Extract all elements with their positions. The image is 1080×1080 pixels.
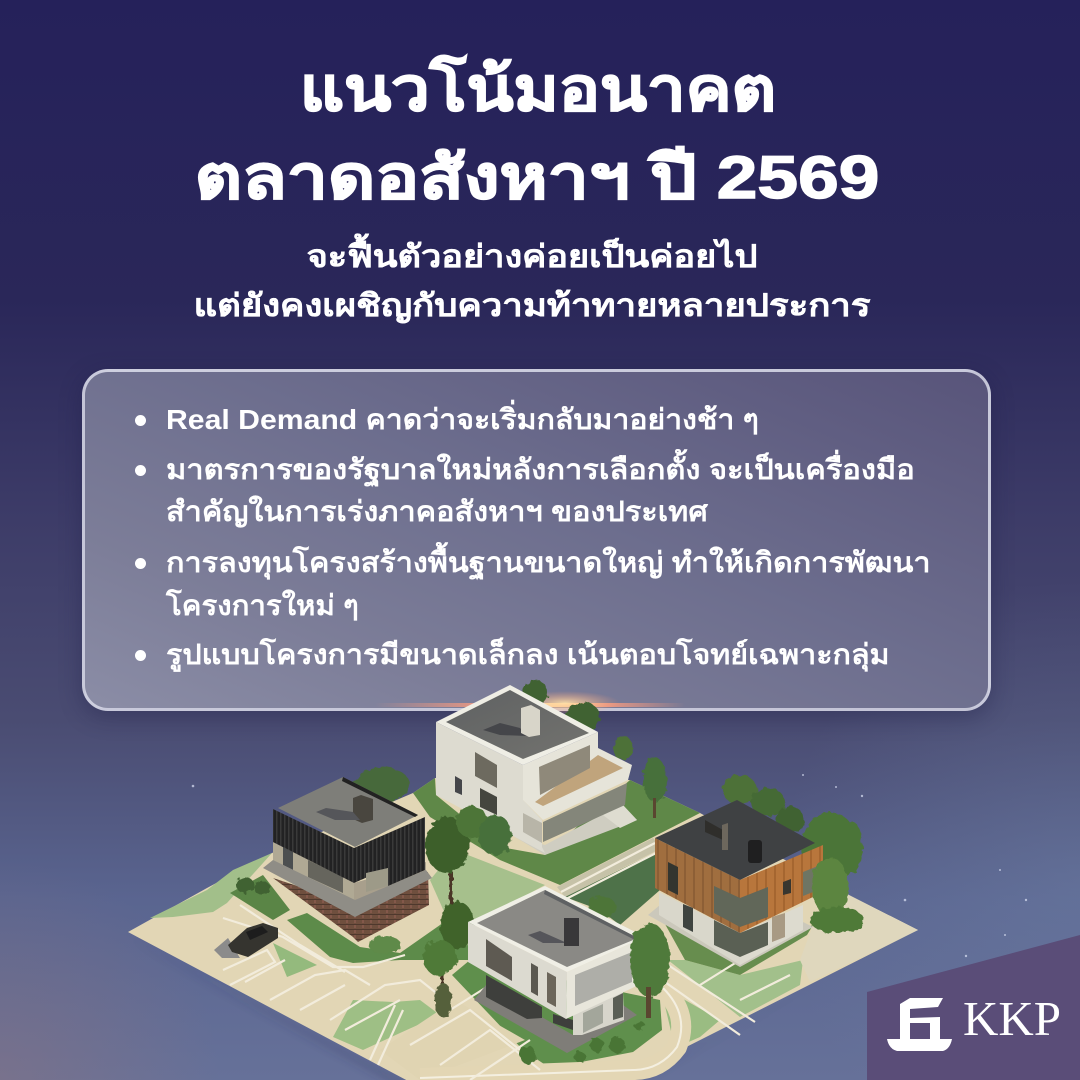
- tree trunks: [646, 798, 656, 1018]
- bullet 3: [135, 542, 930, 621]
- car: [214, 923, 278, 958]
- ground shadow: [128, 936, 918, 1080]
- logo wordmark: KKP: [963, 991, 1061, 1046]
- sun glow: [375, 691, 685, 715]
- subtitle: จะฟื้นตัวอย่างค่อยเป็นค่อยไป: [307, 239, 757, 274]
- title: แนวโน้มอนาคต: [300, 56, 776, 123]
- trees: right of timber house: [810, 857, 864, 933]
- bullet list: Real Demand คาดว่าจะเริ่มกลับมาอย่างช้า ๆ: [166, 404, 759, 435]
- subtitle: แต่ยังคงเผชิญกับความท้าทายหลายประการ: [194, 288, 870, 323]
- panel: key trends: [82, 369, 991, 711]
- ground plate: [128, 778, 918, 1080]
- bullet list: รูปแบบโครงการมีขนาดเล็กลง เน้นตอบโจทย์เฉพาะกลุ่ม: [166, 639, 890, 670]
- bullet 2: [135, 449, 915, 528]
- title: ตลาดอสังหาฯ ปี 2569: [195, 144, 879, 211]
- bullet list: สำคัญในการเร่งภาคอสังหาฯ ของประเทศ: [166, 496, 708, 527]
- trees: centre: [425, 806, 616, 949]
- house: black clad: [263, 777, 432, 942]
- bullet list: [135, 400, 930, 672]
- bullet 1: [135, 400, 759, 435]
- bullet 4: [135, 637, 890, 672]
- house: timber: [648, 800, 823, 967]
- stars: [192, 774, 1027, 957]
- title: [195, 53, 879, 211]
- bullet list: มาตรการของรัฐบาลใหม่หลังการเลือกตั้ง จะเป็นเครื่องมือ: [166, 454, 915, 485]
- bullet list: การลงทุนโครงสร้างพื้นฐานขนาดใหญ่ ทำให้เกิดการพัฒนา: [166, 547, 930, 578]
- subtitle: [194, 233, 870, 324]
- bullet list: โครงการใหม่ ๆ: [166, 590, 359, 621]
- house: front white: [468, 886, 645, 1053]
- house: white top: [436, 685, 637, 855]
- back trees: [354, 680, 862, 882]
- trees: front: [236, 758, 670, 1064]
- logo mark: [887, 998, 952, 1051]
